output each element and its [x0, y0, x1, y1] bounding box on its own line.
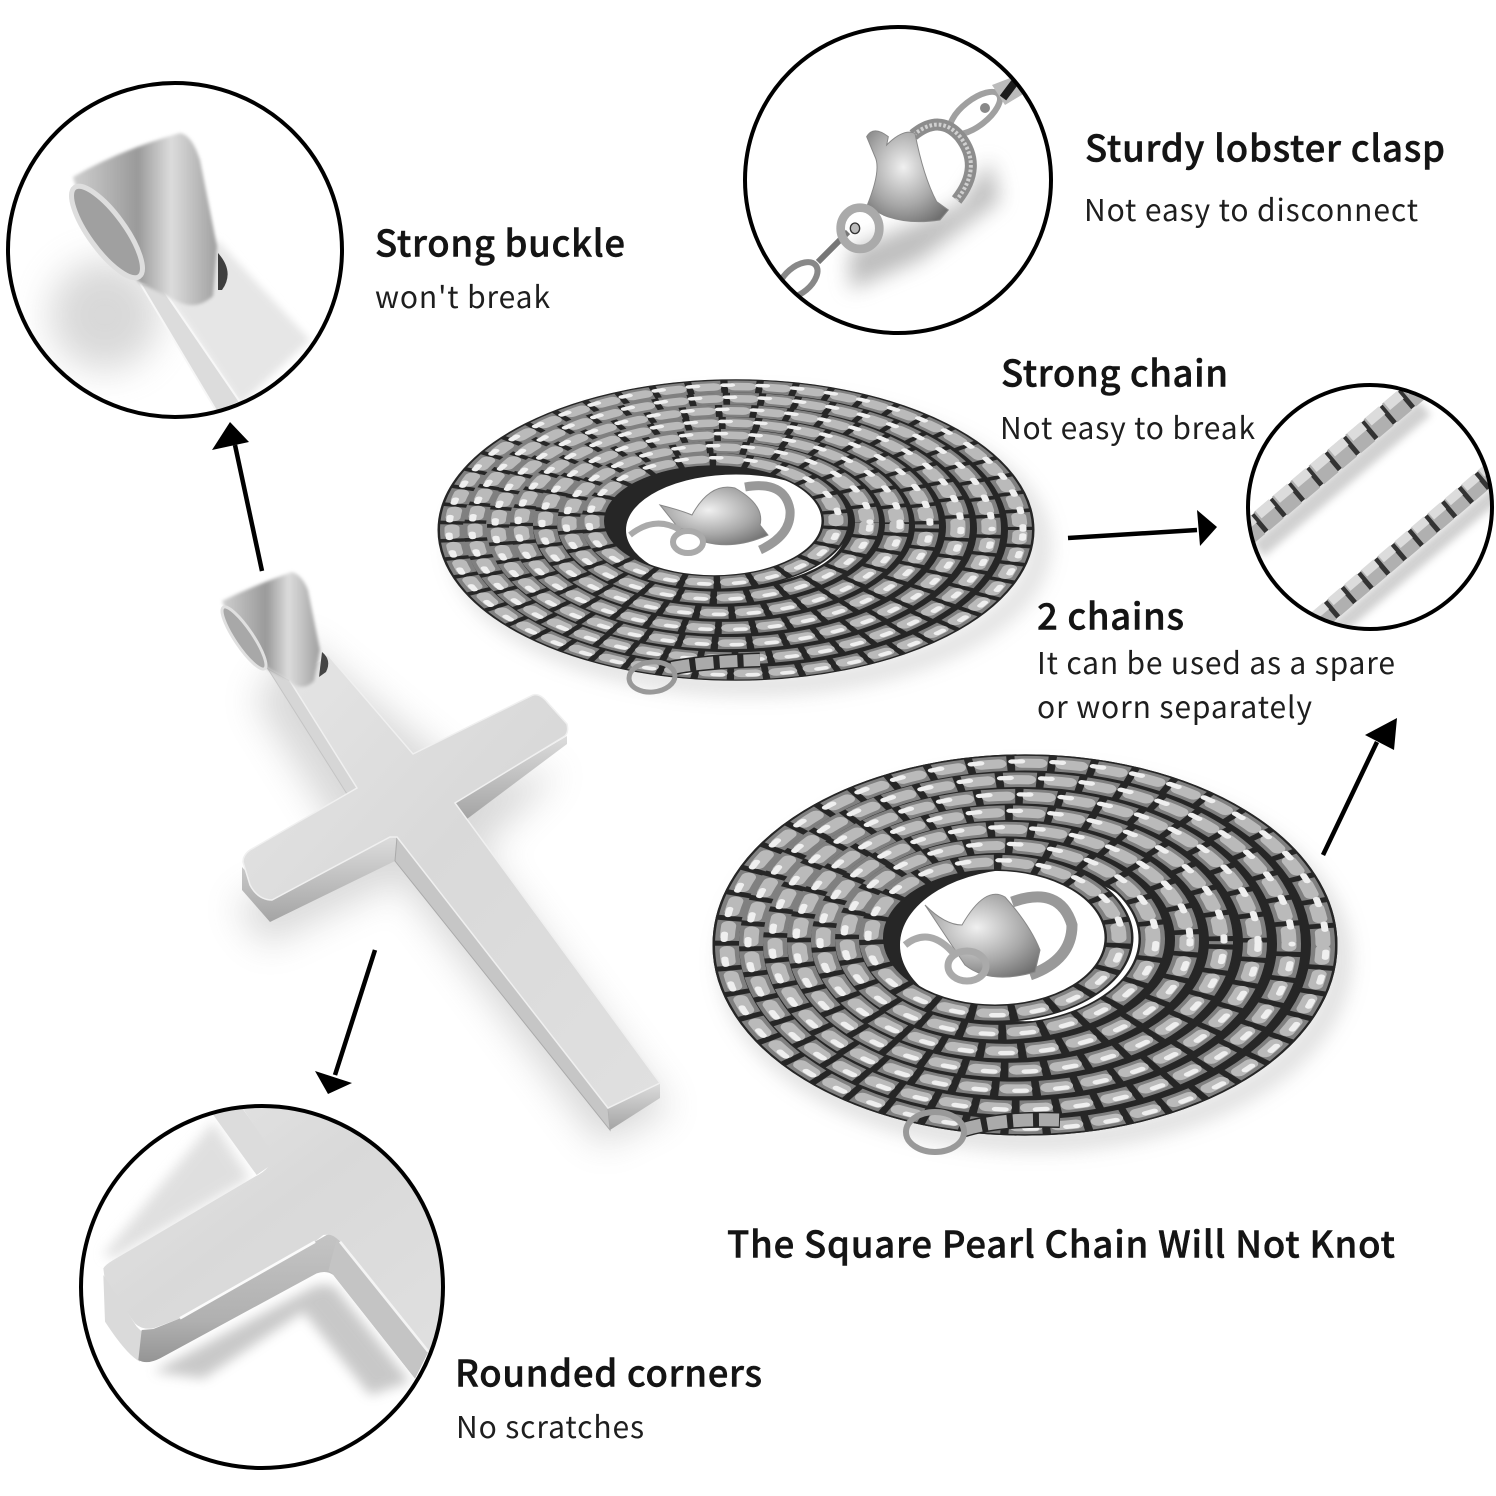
upper chain tail: [672, 660, 760, 668]
panel: lobster clasp detail: [745, 27, 1051, 333]
chain strand two: [1314, 465, 1495, 622]
heading: strong buckle: Strong buckle: [375, 214, 625, 268]
arrow: to rounded corners: [315, 950, 375, 1094]
text: spare or separately: It can be used as a spare: [1037, 639, 1395, 683]
upper end ring: [628, 660, 676, 694]
arrow: to buckle: [212, 422, 262, 571]
upper clasp: [630, 484, 795, 556]
upper coiled chain: [449, 385, 1040, 694]
heading: square pearl chain: The Square Pearl Chain Will Not Knot: [727, 1216, 1395, 1268]
lower chain: [780, 230, 850, 296]
lower clasp: [905, 882, 1075, 988]
heading: rounded corners: Rounded corners: [455, 1344, 762, 1398]
arrow: to chain detail: [1068, 510, 1217, 546]
arrow: to 2 chains: [1323, 718, 1397, 855]
text: won't break: won't break: [375, 273, 550, 317]
lower end ring: [906, 1112, 964, 1152]
chain strand one: [1240, 385, 1417, 537]
panel: strong buckle detail: [8, 83, 342, 417]
heading: 2 chains: 2 chains: [1037, 588, 1184, 640]
text: not easy to disconnect: Not easy to disconnect: [1084, 186, 1418, 230]
cross pendant: [216, 572, 670, 1145]
text: spare or separately: or worn separately: [1037, 683, 1312, 727]
lower chain tail: [962, 1120, 1060, 1130]
panel: chain detail: [1240, 385, 1496, 632]
heading: strong chain: Strong chain: [1001, 344, 1228, 398]
heading: sturdy lobster clasp: Sturdy lobster clasp: [1085, 120, 1445, 172]
text: no scratches: No scratches: [456, 1403, 644, 1447]
upper chain: [948, 78, 1022, 136]
panel: rounded corners detail: [79, 1104, 445, 1470]
pendant bale: [216, 572, 328, 687]
text: spare or separately: [1037, 639, 1395, 727]
lower coiled chain: [724, 761, 1340, 1152]
text: not easy to break: Not easy to break: [1000, 404, 1255, 448]
